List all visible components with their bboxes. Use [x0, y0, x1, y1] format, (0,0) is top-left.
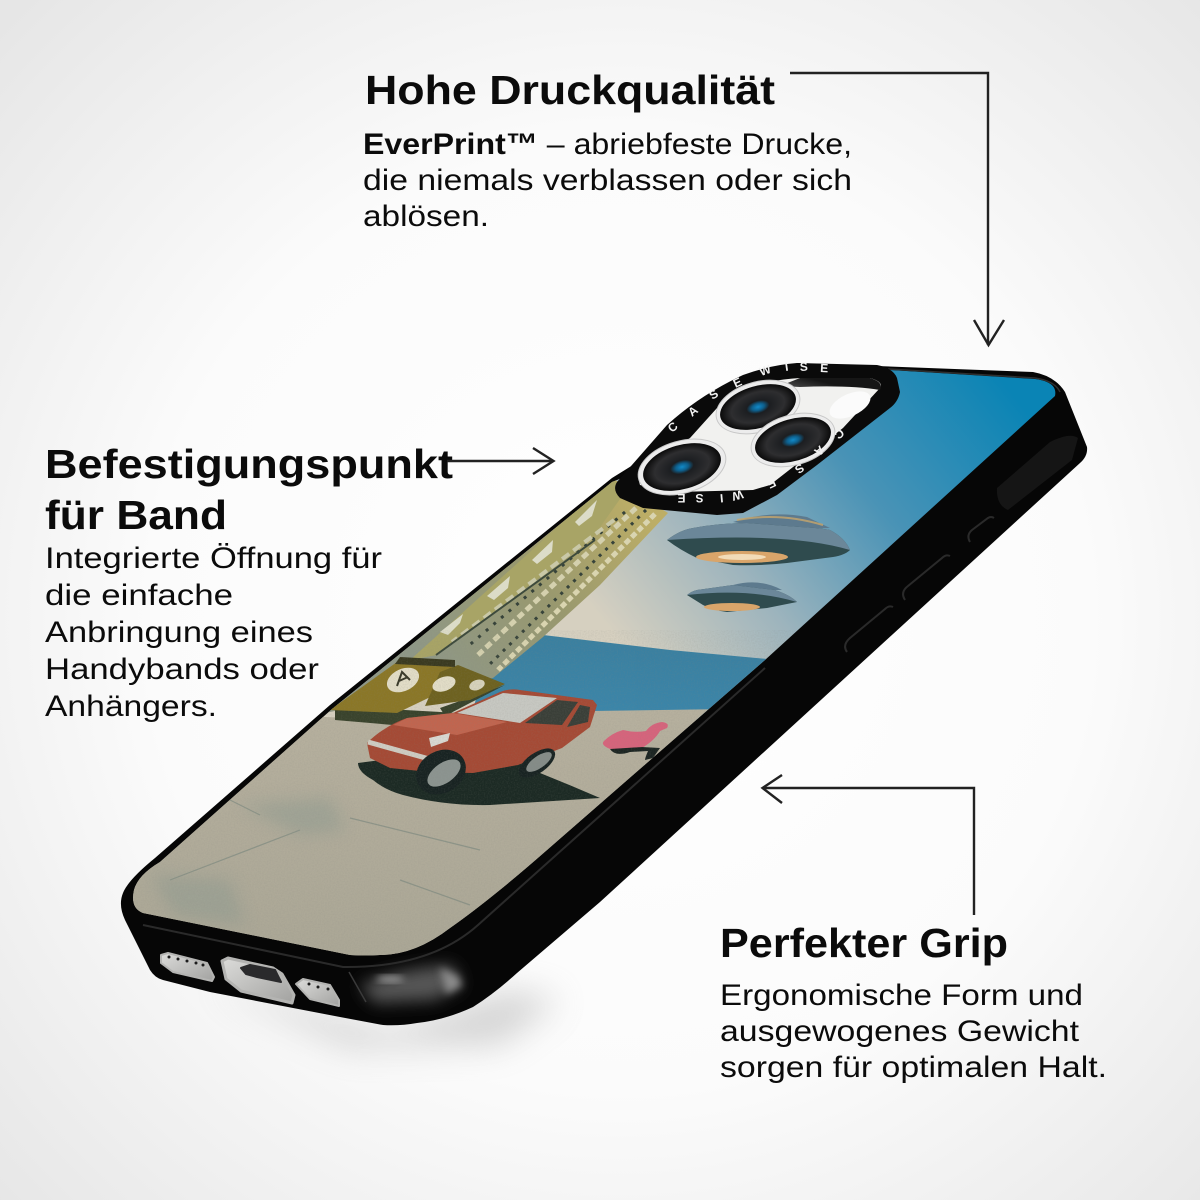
UFO small — [687, 582, 797, 612]
sea — [474, 635, 766, 720]
text block: strap attachment — [45, 542, 382, 723]
brand lettering bottom: CASEWISE — [677, 426, 847, 505]
text block: strap attachment: Integrierte Öffnung für — [45, 542, 382, 575]
lens: lower left — [632, 430, 732, 504]
text block: print quality: ablösen. — [363, 200, 489, 233]
heading: Perfekter Grip: Perfekter Grip — [720, 920, 1008, 966]
heading: Befestigungspunkt für Band: für Band — [45, 492, 227, 538]
window inner bevel — [780, 378, 881, 390]
text block: strap attachment: die einfache — [45, 579, 233, 612]
case corner highlight — [360, 965, 462, 1003]
UFO large — [667, 514, 850, 565]
heading: Hohe Druckqualität: Hohe Druckqualität — [365, 67, 775, 113]
side detail: volume buttons and switch — [845, 517, 994, 652]
ground stains — [150, 798, 345, 925]
printed screen artwork — [133, 370, 1056, 956]
bump frame — [615, 363, 900, 515]
bins — [330, 657, 505, 713]
grass strip — [335, 685, 505, 725]
brand lettering top: CASEWISE — [665, 360, 829, 435]
bump clear window — [639, 378, 881, 492]
text block: print quality — [363, 128, 852, 233]
phone case — [90, 360, 1100, 1025]
flamingo float — [603, 722, 668, 760]
building yellow facade strip — [410, 478, 625, 660]
charging port — [222, 958, 294, 1003]
ground — [133, 709, 708, 956]
sky — [133, 370, 1056, 956]
text block: strap attachment: Anhängers. — [45, 690, 217, 723]
text block: strap attachment: Handybands oder — [45, 653, 319, 686]
case body — [121, 363, 1087, 1025]
text block: grip: ausgewogenes Gewicht — [720, 1015, 1080, 1048]
arrow: print quality to phone — [790, 73, 1004, 345]
text block: print quality: die niemals verblassen oder sich — [363, 164, 852, 197]
sand and sea texture — [330, 630, 793, 805]
lens: right — [745, 404, 841, 476]
camera flash — [825, 386, 875, 424]
top rim line — [888, 369, 1060, 392]
arrow: grip to phone side — [762, 775, 974, 915]
car shadow — [358, 760, 600, 806]
building large windows — [440, 500, 597, 635]
side detail: raised grip — [997, 436, 1078, 510]
case rim highlight — [143, 668, 765, 967]
case corner moulding line — [349, 972, 366, 1002]
building dense windows — [436, 508, 655, 670]
text block: strap attachment: Anbringung eines — [45, 616, 313, 649]
red car — [367, 689, 597, 787]
arrow: strap attachment to camera — [447, 448, 554, 474]
camera bump — [615, 360, 900, 515]
speaker grille right — [296, 979, 339, 1006]
ground cracks — [170, 790, 480, 905]
text block: print quality: EverPrint™ – abriebfeste Drucke, — [363, 128, 852, 161]
heading: Befestigungspunkt für Band — [45, 441, 453, 538]
text block: grip — [720, 979, 1107, 1084]
lens: top — [710, 371, 806, 443]
building wall — [300, 478, 668, 715]
phone shadow — [210, 985, 560, 1048]
heading: Befestigungspunkt für Band: Befestigungspunkt — [45, 441, 453, 487]
speaker grille left — [161, 953, 214, 981]
text block: grip: sorgen für optimalen Halt. — [720, 1051, 1107, 1084]
text block: grip: Ergonomische Form und — [720, 979, 1083, 1012]
